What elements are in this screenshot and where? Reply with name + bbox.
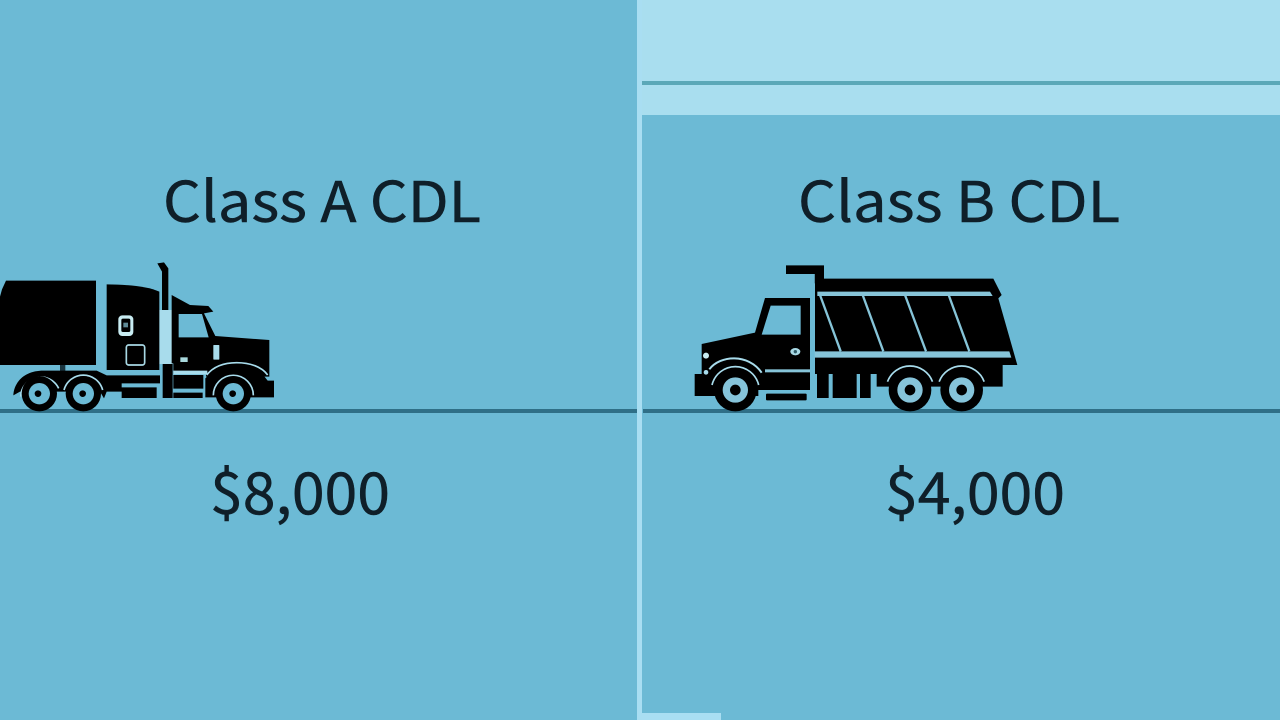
divider xyxy=(637,0,642,720)
bottom tab xyxy=(642,713,721,720)
top band xyxy=(642,0,1280,115)
ground line: Class B xyxy=(643,409,1280,413)
panel: Class A xyxy=(0,0,637,720)
heading: Class A CDL: Class A CDL xyxy=(163,158,481,239)
ground line: Class A xyxy=(0,409,637,413)
panel: Class B xyxy=(642,115,1280,720)
value: Class B cost: $4,000 xyxy=(885,447,1065,531)
icon: semi truck xyxy=(0,262,274,411)
heading: Class B CDL: Class B CDL xyxy=(798,158,1120,239)
value: Class A cost: $8,000 xyxy=(210,447,390,531)
icon: dump truck xyxy=(695,265,1017,411)
